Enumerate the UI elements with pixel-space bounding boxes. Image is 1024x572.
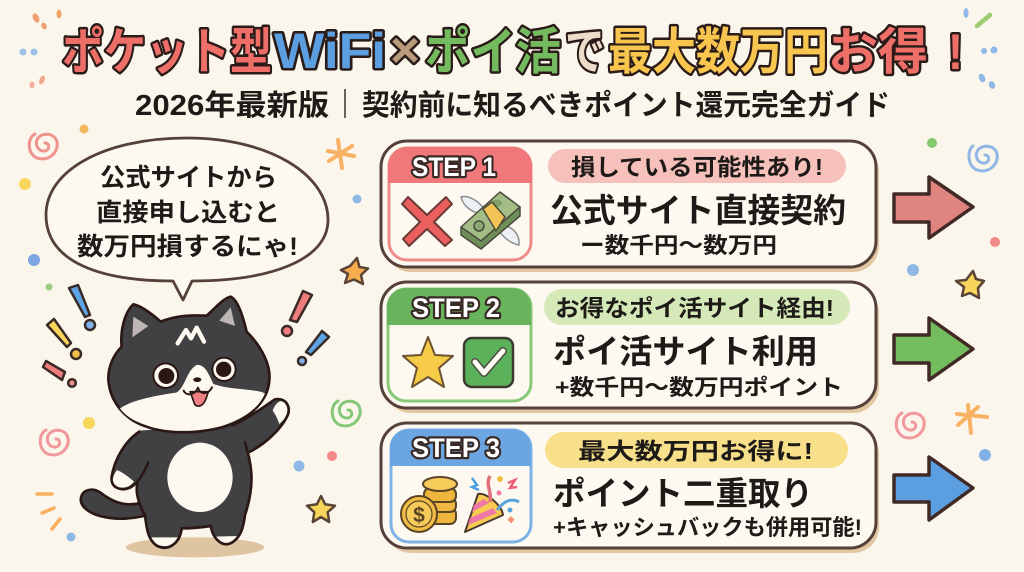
- step 1 badge: STEP 1: [412, 152, 496, 182]
- arrow: green: [894, 318, 973, 380]
- subtitle: 契約前に知るべきポイント還元完全ガイド: [362, 89, 890, 122]
- step 1 card: [381, 141, 879, 272]
- icon: gold star: [403, 337, 453, 387]
- title: [62, 22, 963, 80]
- confetti: top corners: [20, 8, 998, 134]
- speech bubble: 公式サイトから: [100, 164, 277, 192]
- arrow: blue: [894, 457, 973, 520]
- icon: flying money: [461, 192, 520, 249]
- step 2 badge: STEP 2: [412, 293, 500, 323]
- speech bubble: 数万円損するにゃ!: [77, 233, 298, 261]
- step 3 pill: [545, 432, 848, 468]
- step 1 pill: 損している可能性あり!: [571, 154, 823, 180]
- title: WiFi: [274, 23, 386, 79]
- subtitle: 2026年最新版: [135, 89, 329, 122]
- title: で: [565, 24, 605, 80]
- step 3 badge: STEP 3: [412, 433, 500, 463]
- speech bubble: [46, 138, 328, 300]
- cat mascot: [81, 297, 289, 557]
- step 2 heading: ポイ活サイト利用: [553, 333, 818, 370]
- title: 最大数万円: [608, 24, 828, 80]
- title: !: [948, 24, 963, 80]
- icon: green check: [464, 338, 513, 387]
- step 3 card: [381, 423, 879, 553]
- exclamation marks around cat: [43, 285, 329, 387]
- step 3 amount: +キャッシュバックも併用可能!: [553, 515, 862, 540]
- icon: party popper: [465, 476, 519, 532]
- title: お得: [828, 24, 928, 80]
- step 2 card: [381, 282, 879, 413]
- step 2 badge: [387, 288, 531, 401]
- step 3 heading: ポイント二重取り: [553, 475, 813, 512]
- step 2 pill: お得なポイ活サイト経由!: [555, 295, 834, 321]
- step 1 heading: 公式サイト直接契約: [550, 192, 846, 229]
- arrow: red: [894, 177, 973, 238]
- icon: red cross: [402, 197, 452, 246]
- step 2 pill: [544, 289, 850, 325]
- step 1 amount: ー数千円〜数万円: [580, 233, 777, 258]
- title: ポケット型: [62, 24, 272, 80]
- icon: coins: $: [413, 504, 425, 527]
- icon: coins: [401, 477, 457, 532]
- step 1 badge: [388, 147, 532, 260]
- step 2 amount: +数千円〜数万円ポイント: [555, 375, 843, 400]
- step 3 badge: [390, 429, 531, 542]
- step 3 pill: 最大数万円お得に!: [578, 438, 813, 464]
- decorations: right: [896, 138, 1000, 461]
- title: ポイ活: [425, 24, 561, 80]
- step 1 pill: [548, 149, 846, 183]
- decorations: left: [19, 134, 368, 542]
- title: ×: [390, 22, 420, 78]
- subtitle: [135, 89, 890, 122]
- speech bubble: 直接申し込むと: [96, 199, 280, 227]
